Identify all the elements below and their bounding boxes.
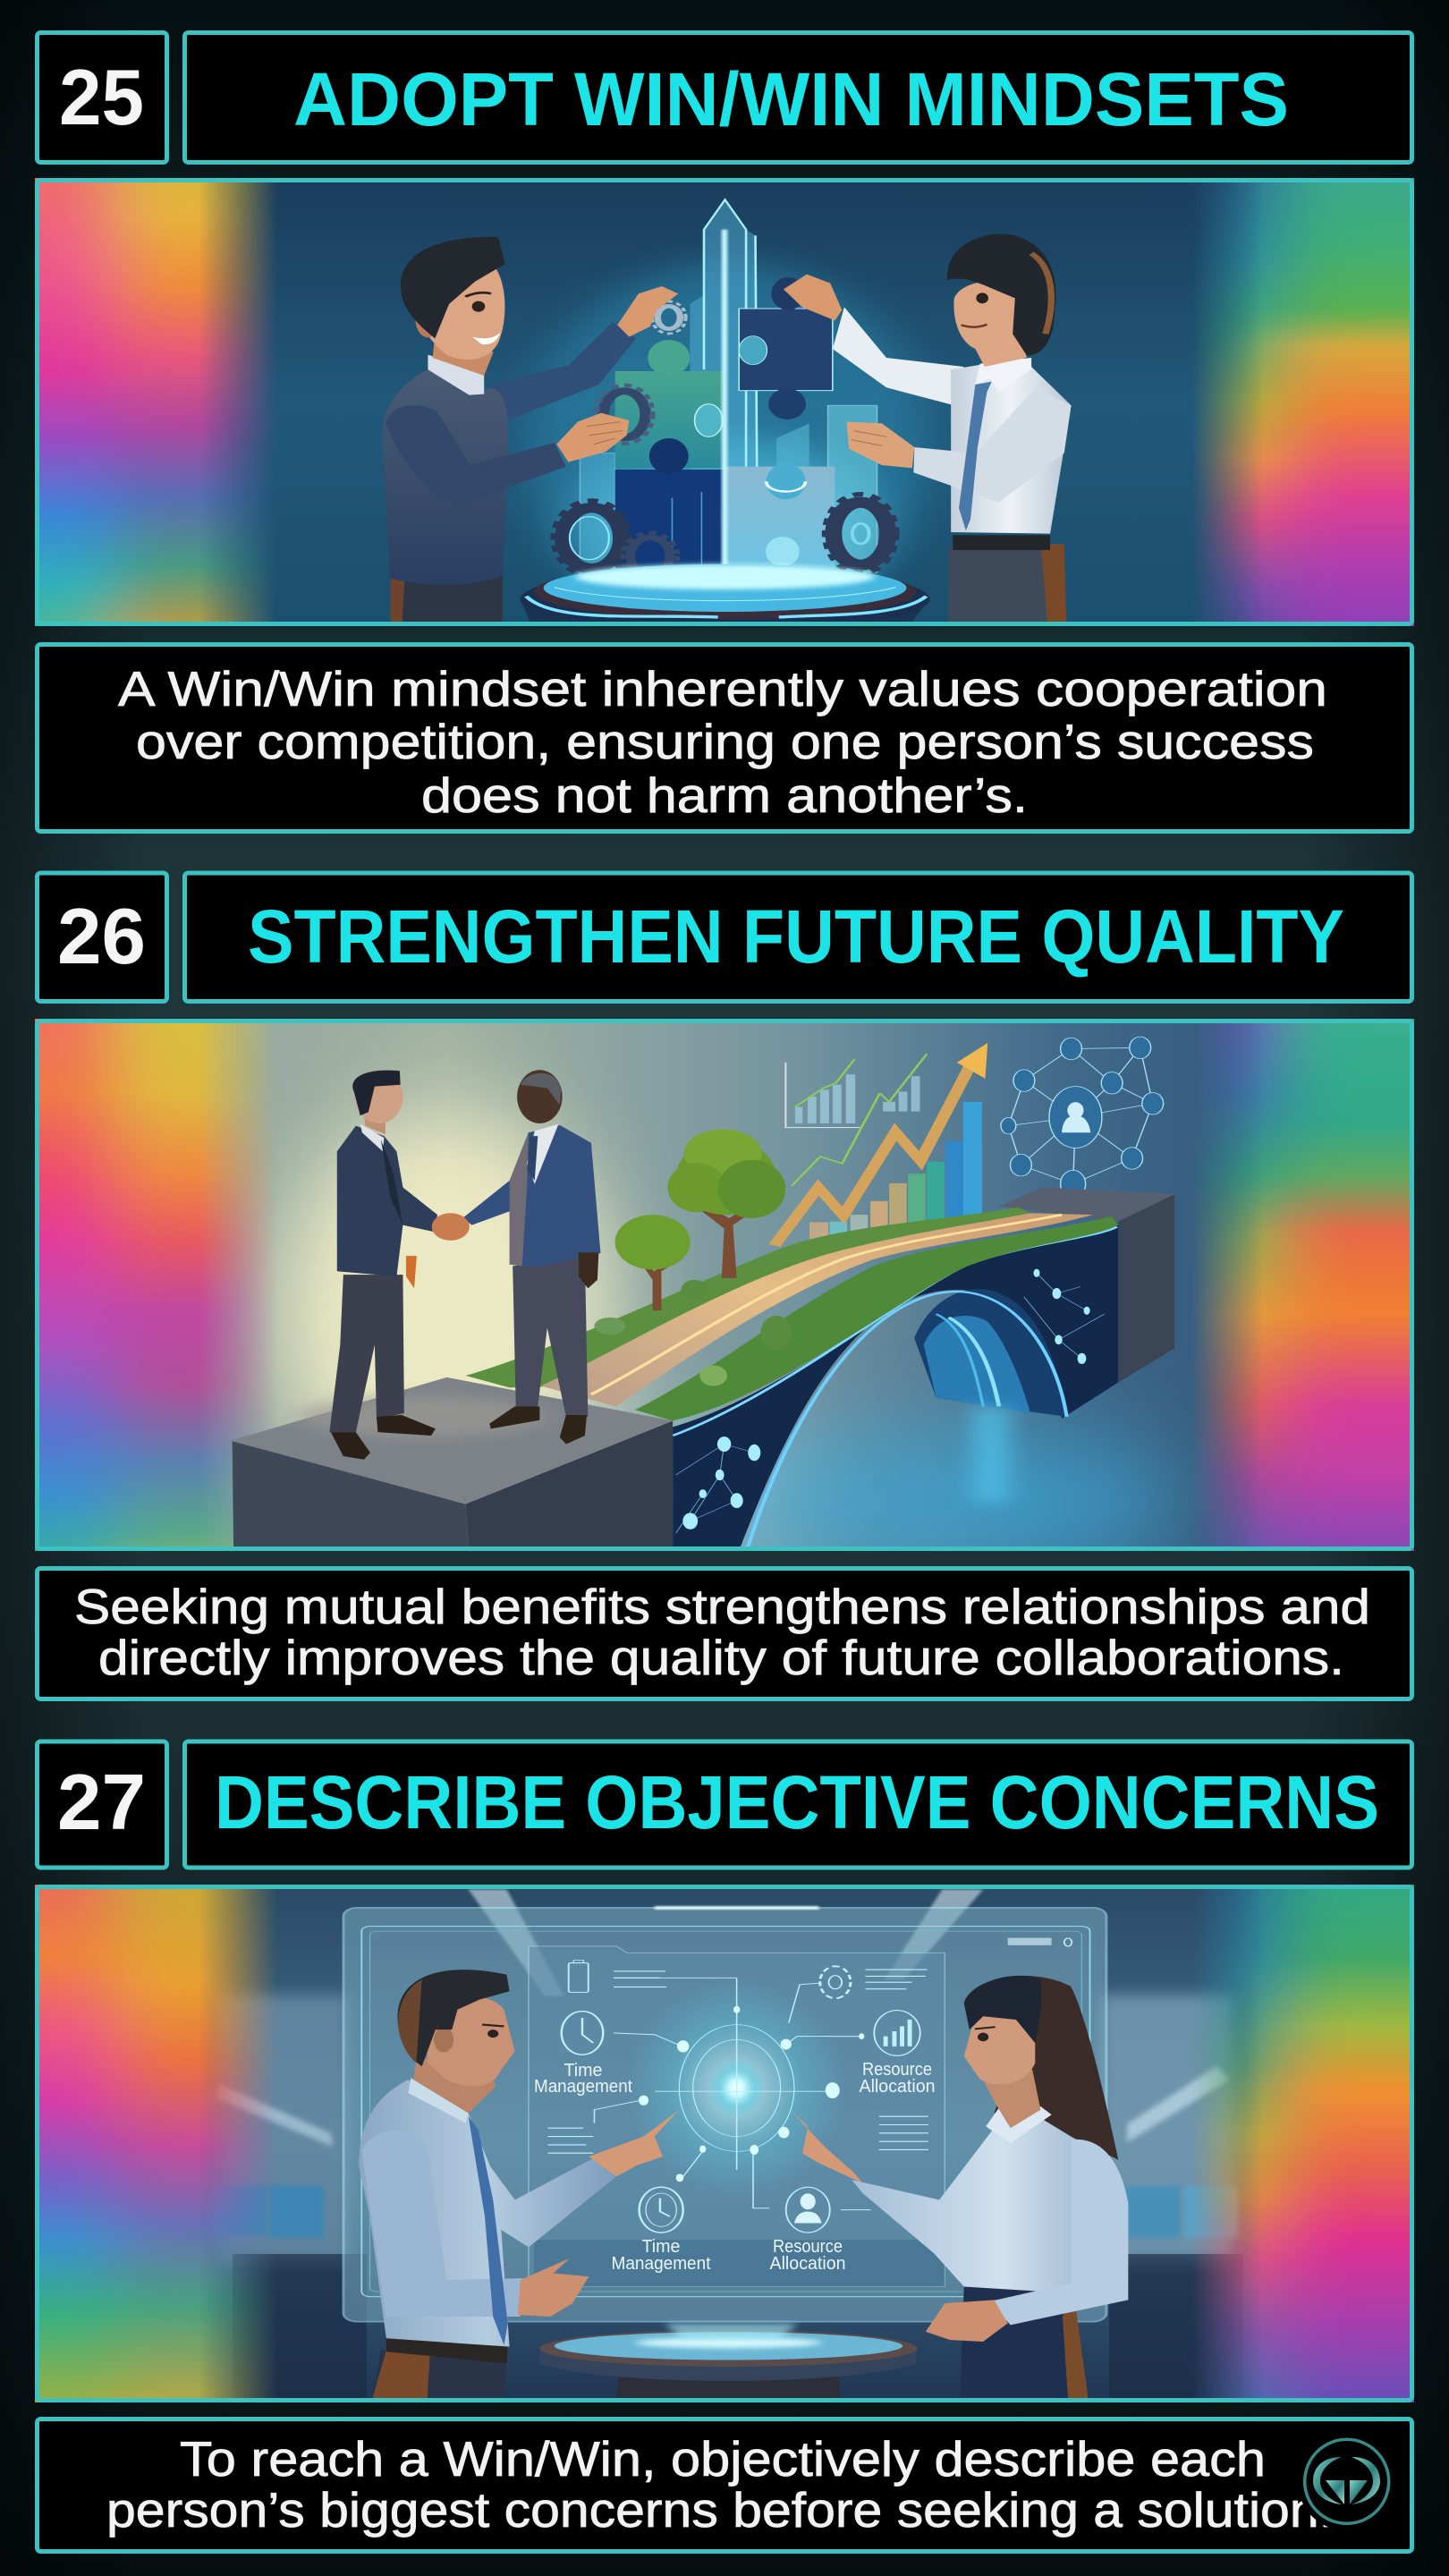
- section 25 description: A Win/Win mindset inherently values cooperation: [118, 661, 1327, 716]
- illustration frame 27: [38, 1887, 1411, 2401]
- businessman right: [462, 1070, 600, 1445]
- icon: gear ring: [820, 1966, 851, 1998]
- section 25 description: does not harm another’s.: [421, 767, 1028, 823]
- icon: person: [786, 2187, 830, 2233]
- screen label: Resource Allocation upper: [859, 2060, 936, 2097]
- woman in light blue blouse: [792, 1976, 1128, 2398]
- man in sweater: [382, 237, 678, 624]
- puzzle piece: green: [615, 340, 723, 468]
- icon: clock lower: [640, 2187, 683, 2233]
- section 25 number badge: [38, 32, 166, 163]
- office background: [213, 1995, 1243, 2402]
- illustration panel: two colleagues at holographic display: [35, 1885, 1414, 2402]
- screen label: Time Management lower: [612, 2237, 711, 2274]
- screen label: Resource Allocation lower: [769, 2237, 846, 2274]
- illustration frame 26: [38, 1021, 1411, 1549]
- section 26 number badge: 26: [57, 892, 146, 980]
- illustration frame 25: [38, 181, 1411, 624]
- dashboard icons: [547, 1961, 928, 2233]
- icon: bar chart: [874, 2011, 920, 2055]
- icon: clock upper: [562, 2012, 603, 2055]
- gears: [555, 301, 895, 580]
- puzzle piece: dark upper: [739, 277, 833, 419]
- screen label: Resource Allocation lower: Resource: [773, 2237, 843, 2257]
- person in white shirt with tie: [784, 233, 1072, 624]
- rainbow blur left: [35, 1019, 272, 1551]
- screen label: Time Management upper: Management: [534, 2077, 632, 2097]
- section 27 description: To reach a Win/Win, objectively describe each: [180, 2431, 1266, 2487]
- screen label: Time Management lower: Management: [612, 2254, 711, 2274]
- puzzle piece: navy lower: [615, 438, 752, 568]
- bridge structure: [673, 1188, 1174, 1546]
- tree large: [667, 1129, 785, 1278]
- section 27 number badge: 27: [57, 1758, 146, 1846]
- scene traced group: [382, 199, 1072, 632]
- rainbow blur right: [1195, 178, 1414, 626]
- section 27 description: person’s biggest concerns before seeking a solution.: [106, 2482, 1334, 2538]
- section 25 heading: [184, 32, 1411, 163]
- businessman left: [329, 1070, 437, 1460]
- rainbow blur left: [35, 1885, 274, 2402]
- man in light blue shirt: [359, 1970, 679, 2398]
- section 27 description: [38, 2419, 1411, 2551]
- section 26 number badge: [38, 873, 166, 1002]
- section 26 description: directly improves the quality of future collaborations.: [98, 1630, 1344, 1685]
- section 26 description: Seeking mutual benefits strengthens relationships and: [74, 1579, 1370, 1634]
- holographic table: [539, 2323, 918, 2398]
- section 25 description: over competition, ensuring one person’s success: [136, 714, 1314, 769]
- ceiling lights: [469, 1889, 983, 1996]
- growth charts and arrow: [775, 1043, 987, 1246]
- glowing tower: [580, 199, 877, 597]
- section 25 description: [38, 644, 1411, 832]
- section 26 heading: STRENGTHEN FUTURE QUALITY: [248, 894, 1344, 979]
- screen label: Time Management lower: Time: [642, 2237, 680, 2257]
- tree small: [615, 1215, 691, 1310]
- holographic platform: [520, 564, 930, 631]
- icon: battery checklist: [569, 1961, 589, 1992]
- stone block: [231, 1377, 673, 1546]
- grass and glowing road: [466, 1208, 1118, 1421]
- watermark logo: [1298, 2432, 1396, 2530]
- screen label: Resource Allocation upper: Allocation: [859, 2077, 936, 2097]
- handshake: [432, 1213, 470, 1241]
- section 27 heading: [184, 1741, 1411, 1868]
- screen label: Resource Allocation upper: Resource: [862, 2060, 932, 2080]
- illustration panel: handshake on glowing bridge to growth: [35, 1019, 1414, 1551]
- section 25 number badge: 25: [59, 53, 144, 141]
- people network diagram: [1001, 1037, 1164, 1198]
- illustration panel: two people assembling puzzle tower: [35, 178, 1414, 626]
- section 27 number badge: [38, 1741, 166, 1868]
- rainbow blur left: [35, 178, 274, 626]
- screen label: Resource Allocation lower: Allocation: [769, 2254, 846, 2274]
- scene traced group: [231, 1037, 1174, 1546]
- rainbow blur right: [1195, 1885, 1414, 2402]
- holographic glass screen: [343, 1906, 1106, 2322]
- section 26 heading: [184, 873, 1411, 1002]
- section 26 description: [38, 1569, 1411, 1699]
- screen label: Time Management upper: Time: [564, 2061, 603, 2080]
- section 25 heading: ADOPT WIN/WIN MINDSETS: [293, 57, 1289, 141]
- central glowing core: [594, 1978, 871, 2210]
- scene traced group: [343, 1889, 1128, 2398]
- rainbow blur right: [1195, 1019, 1414, 1551]
- screen label: Time Management upper: [534, 2061, 632, 2097]
- puzzle piece: light lower: [725, 463, 835, 570]
